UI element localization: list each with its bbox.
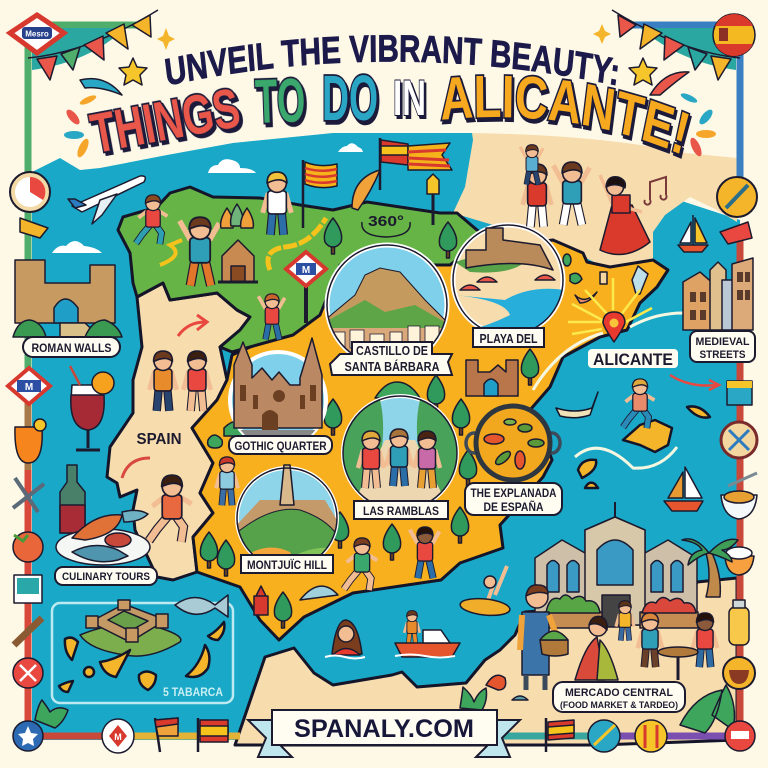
sea [32, 133, 740, 740]
land: western sand [107, 283, 250, 580]
flamenco dancer [600, 175, 650, 254]
panel: Playa del [453, 225, 565, 340]
small town hall [218, 240, 258, 282]
swimmer [325, 620, 365, 658]
icon: metro left: M [25, 382, 33, 393]
label: Mercado Central: (FOOD MARKET & TARDEO) [560, 700, 678, 711]
banner: Spanaly.com [248, 710, 520, 757]
label: Montjuic Hill: MONTJUÏC HILL [247, 557, 327, 572]
panel: Montjuic Hill [235, 464, 339, 554]
seafood plate [56, 510, 150, 565]
icon: star [13, 721, 43, 751]
inflatable raft with swimmer [459, 566, 511, 618]
icon: metro circle: M [114, 732, 122, 742]
label: Mercado Central [553, 682, 685, 712]
label: Playa del [473, 328, 544, 347]
market worker far [616, 601, 634, 641]
tourists couple [149, 351, 211, 411]
label: Culinary Tours [55, 567, 157, 585]
medieval buildings [683, 258, 753, 330]
label: Gothic Quarter: GOTHIC QUARTER [234, 439, 327, 453]
balearic islands and gondola [556, 392, 710, 488]
shopper in red dress [575, 616, 618, 680]
land: southern orange [192, 237, 668, 640]
flag: Catalan small [303, 160, 337, 228]
land: southern sand and market coast [235, 578, 737, 745]
ribbon right [720, 222, 752, 244]
person on island [623, 379, 654, 428]
icon: flag two [198, 718, 228, 752]
Tabarca island with fort [80, 600, 181, 656]
cocktail icon [15, 419, 46, 463]
label: Las Ramblas [354, 501, 448, 519]
label: Castillo: CASTILLO DE [356, 344, 428, 358]
postcard and scroll icons [13, 575, 43, 688]
spain label: SPAIN [136, 431, 182, 448]
label: Mercado Central: MERCADO CENTRAL [565, 687, 673, 699]
title line 2: THINGS: THINGS [86, 76, 245, 165]
cutlery icon [13, 478, 44, 512]
bushes [208, 382, 420, 448]
sand northeast [453, 133, 737, 270]
icon: metro circle [102, 719, 134, 753]
lamp post [427, 174, 439, 225]
label: Explanada: THE EXPLANADA [470, 486, 557, 500]
icon: metro diamond: Mesro [25, 30, 49, 38]
sailboat lower [664, 467, 703, 511]
clouds [52, 143, 363, 253]
orange trees trio [221, 204, 253, 228]
icon: cutlery circle [635, 720, 667, 752]
panel: Las Ramblas [340, 396, 460, 510]
metro sign: M [302, 265, 310, 276]
paella pan [466, 406, 560, 480]
plants [35, 685, 734, 733]
360 view label [362, 213, 410, 237]
icon: metro diamond [10, 15, 64, 53]
label: Playa del: PLAYA DEL [480, 332, 538, 346]
icon: red circle [725, 721, 755, 751]
label: Las Ramblas: LAS RAMBLAS [363, 504, 439, 518]
label: Culinary Tours: CULINARY TOURS [62, 571, 150, 583]
title line 2: IN: IN [393, 70, 426, 126]
market stalls [544, 595, 698, 628]
title line 2: DO: DO [322, 62, 378, 134]
red arrow [178, 315, 207, 336]
palm tree [682, 539, 738, 597]
dining table [638, 613, 717, 680]
label: Gothic Quarter [229, 436, 332, 454]
label: Medieval Streets [690, 331, 755, 362]
sangria glass [70, 366, 114, 450]
alicante pin [568, 278, 652, 342]
360 view label: 360° [368, 213, 404, 230]
dancing family [520, 145, 590, 227]
pagoda and rock [254, 586, 338, 615]
icon: flag one [155, 718, 178, 752]
tomato icon [13, 532, 43, 562]
music note [644, 177, 666, 205]
bunting left [28, 10, 158, 80]
sailboat upper [678, 215, 708, 252]
label: Roman Walls [23, 337, 120, 357]
label: Castillo: SANTA BÁRBARA [344, 359, 440, 374]
metro sign [286, 252, 326, 323]
fish [175, 595, 228, 617]
icon: ribbon left [20, 218, 48, 238]
icon: metro left [8, 368, 50, 404]
panel: Castillo de Santa Barbara [324, 242, 450, 353]
panel: Gothic Quarter [230, 338, 326, 450]
label: Montjuic Hill [241, 555, 333, 573]
icon: paint circle [588, 720, 620, 752]
red arrow spain [122, 458, 150, 478]
right icons [721, 381, 757, 689]
flag: big Spain flag [352, 138, 452, 210]
label: Castillo [330, 342, 452, 375]
trail path [268, 218, 326, 270]
icon: plane [68, 176, 145, 224]
gate [466, 360, 518, 396]
label: Medieval Streets: STREETS [700, 349, 746, 361]
land: northern green [118, 187, 487, 352]
market vendor [520, 585, 568, 690]
NE orange small icons [563, 254, 648, 303]
label: Medieval Streets: MEDIEVAL [696, 336, 750, 348]
title line 1: UNVEIL THE VIBRANT BEAUTY: [164, 34, 618, 86]
title line 2: TO: TO [254, 66, 306, 137]
runner girl [149, 475, 192, 542]
panel: Tabarca: 5 TABARCA [163, 685, 223, 699]
people: north green [136, 172, 291, 286]
rock and maple [486, 675, 528, 700]
mercado central building [535, 502, 697, 627]
label: Explanada: DE ESPAÑA [484, 499, 544, 514]
bottom icons [13, 718, 755, 753]
icon: clock [10, 172, 50, 212]
panel: Tabarca [52, 600, 233, 703]
label: Alicante: ALICANTE [593, 350, 673, 369]
trees [200, 218, 539, 628]
boy jumping [258, 294, 285, 339]
decorative stars and splashes [64, 24, 716, 159]
red arrow east [670, 375, 719, 390]
runner and reclining [344, 527, 439, 590]
icon: Spain flag circle [713, 14, 755, 56]
castle: Roman walls [13, 260, 122, 337]
icon: palette [717, 177, 757, 217]
motor boat [395, 611, 460, 658]
small guide person [216, 457, 238, 505]
white route lines [533, 313, 683, 468]
title line 2: ALICANTE: ALICANTE! [440, 74, 692, 159]
bunting right [612, 10, 740, 80]
banner: Spanaly.com: SPANALY.COM [294, 715, 474, 743]
icon: flag three [546, 718, 574, 752]
label: Roman Walls: ROMAN WALLS [32, 343, 112, 355]
wine bottle [60, 465, 85, 533]
label: Explanada [465, 483, 562, 515]
